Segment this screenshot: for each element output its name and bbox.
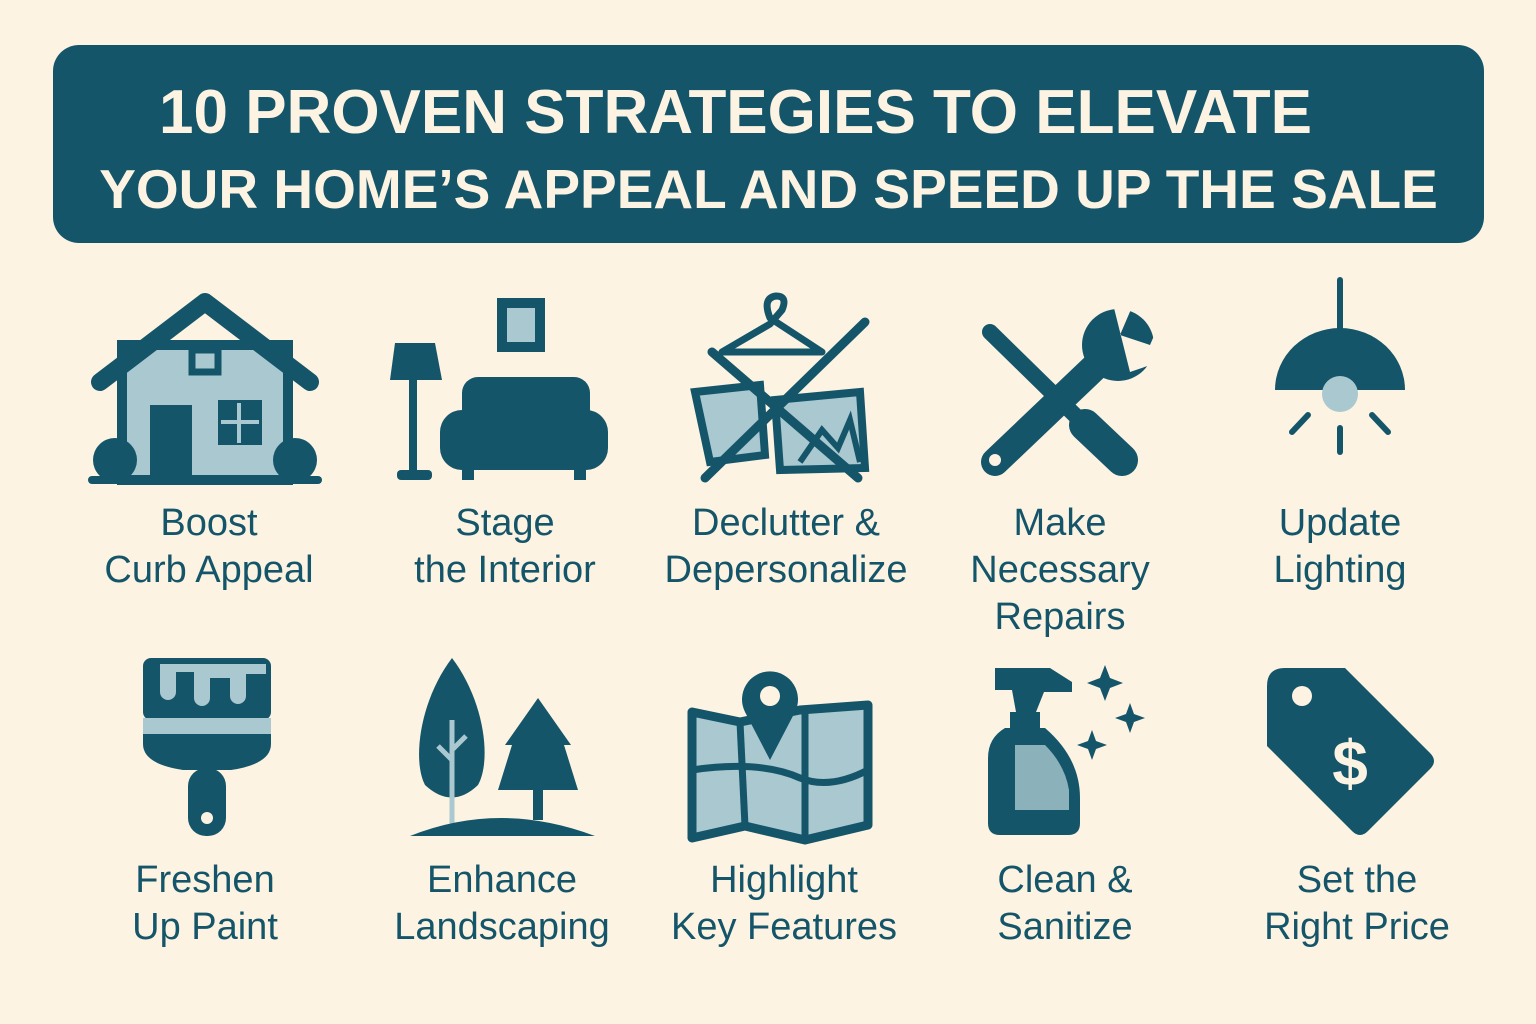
label: Set the Right Price: Set the [1297,859,1417,901]
icon: trees [410,658,595,836]
label: Set the Right Price: Right Price [1264,906,1450,948]
label: Freshen Up Paint [132,859,278,948]
label: Clean & Sanitize [997,859,1133,948]
label: Make Necessary Repairs: Make [1014,502,1106,544]
label: Enhance Landscaping [394,859,610,948]
icon: pendant lamp [1275,280,1405,452]
label: Stage the Interior [414,502,596,591]
title banner [53,45,1484,243]
icon: paint brush [143,658,271,836]
label: Stage the Interior: the Interior [414,549,596,591]
label: Declutter & Depersonalize: Depersonalize [665,549,907,591]
label: Declutter & Depersonalize [665,502,907,591]
icon: price tag [1267,668,1434,835]
label: Boost Curb Appeal: Boost [160,502,258,544]
label: Boost Curb Appeal: Curb Appeal [104,549,314,591]
label: Make Necessary Repairs: Repairs [995,596,1125,638]
label: Freshen Up Paint: Up Paint [132,906,278,948]
label: Update Lighting: Lighting [1273,549,1407,591]
icon: price tag: $ [1332,727,1368,799]
label: Update Lighting: Update [1279,502,1401,544]
icon: map with pin [692,671,868,840]
label: Set the Right Price [1264,859,1450,948]
label: Make Necessary Repairs: Necessary [970,549,1150,591]
title banner: YOUR HOME’S APPEAL AND SPEED UP THE SALE [99,158,1438,220]
icon: declutter [695,296,865,478]
label: Highlight Key Features: Key Features [671,906,897,948]
label: Clean & Sanitize: Sanitize [997,906,1133,948]
label: Freshen Up Paint: Freshen [135,859,275,901]
label: Highlight Key Features: Highlight [710,859,858,901]
label: Declutter & Depersonalize: Declutter & [692,502,880,544]
label: Update Lighting [1273,502,1407,591]
label: Clean & Sanitize: Clean & [997,859,1133,901]
label: Make Necessary Repairs [970,502,1150,638]
label: Stage the Interior: Stage [455,502,555,544]
label: Enhance Landscaping: Landscaping [394,906,610,948]
label: Enhance Landscaping: Enhance [427,859,577,901]
label: Boost Curb Appeal [104,502,314,591]
icon: house [88,302,322,484]
icon: spray bottle [988,665,1145,835]
icon: staged interior [390,298,608,480]
icon: tools [989,300,1165,466]
label: Highlight Key Features [671,859,897,948]
title banner: 10 PROVEN STRATEGIES TO ELEVATE [159,78,1312,147]
